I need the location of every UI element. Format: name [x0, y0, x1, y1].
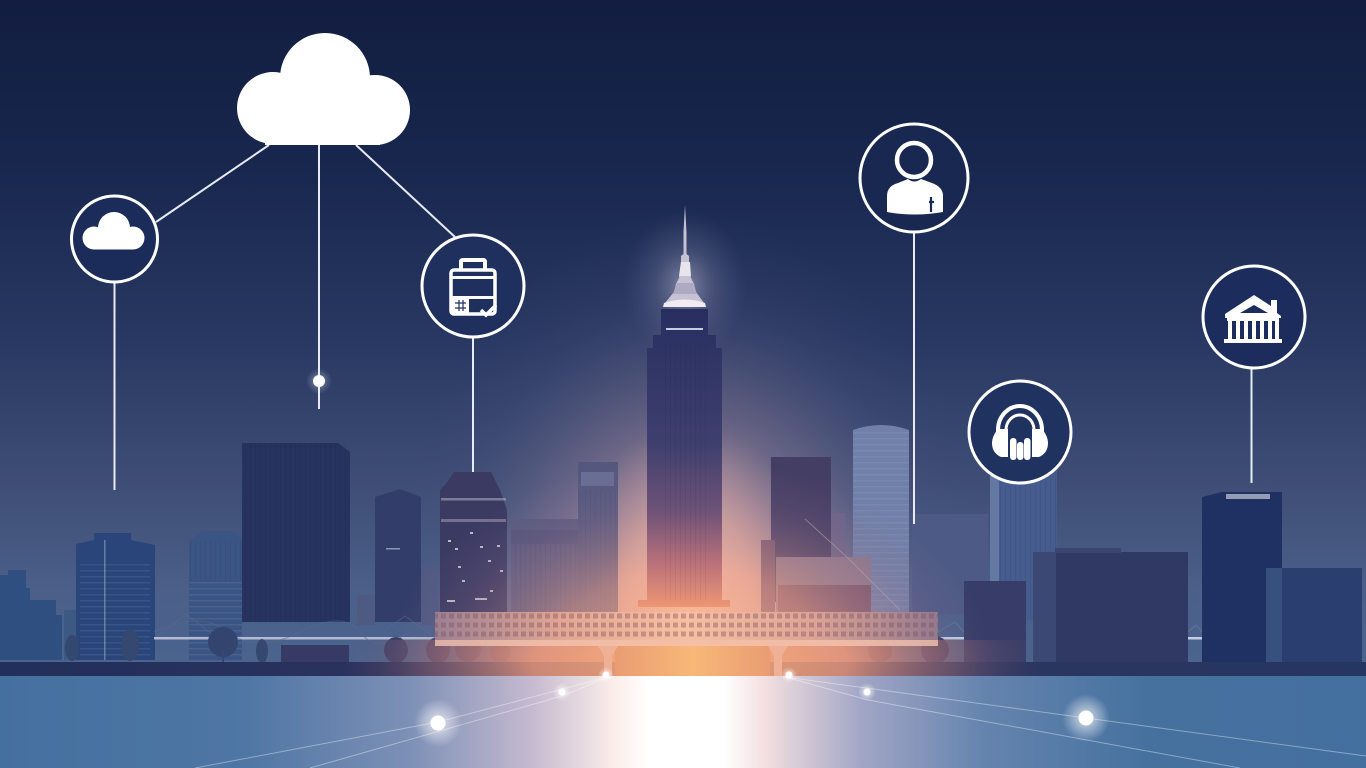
water network lines: [195, 677, 1366, 768]
trees: [65, 627, 949, 664]
water node: shore right: [781, 667, 797, 683]
mid tower glow: [565, 420, 815, 768]
building: right dark tower with sign: [1202, 492, 1282, 662]
building: large right block: [1033, 548, 1188, 662]
water node: shore left: [598, 667, 614, 683]
building: tall dark block: [242, 443, 350, 622]
water: [0, 676, 1366, 768]
building: low right block: [912, 514, 988, 614]
skyline: far-left cluster: [0, 570, 78, 660]
tower spire: [663, 205, 706, 307]
icon: suitcase badge: [422, 235, 524, 337]
water node: small left: [553, 683, 571, 701]
icon: person badge: [860, 124, 968, 232]
building: tall block behind headphones: [990, 470, 1057, 620]
tower shaft: [638, 309, 730, 607]
light overlay on skyline: [380, 440, 1000, 662]
icon: main cloud: [237, 33, 410, 145]
building: right stub: [964, 581, 1026, 662]
icon: bank badge: [1203, 266, 1305, 368]
tower stripes: [661, 345, 708, 600]
building: glass cylinder tower: [853, 425, 909, 612]
building: left twin block: [76, 533, 155, 660]
building: right dark tower: [761, 457, 845, 612]
building: far right block: [1266, 568, 1362, 662]
water node: small right: [858, 683, 876, 701]
central sky glow: [300, 200, 1080, 676]
connector lines from main cloud: [156, 145, 455, 409]
building: left mid tower: [189, 531, 242, 660]
water node: bright left: [414, 699, 462, 747]
building: podium offices: [511, 519, 581, 615]
icon: small cloud badge: [72, 196, 158, 282]
ground strip: [0, 662, 1366, 676]
skyline bridge: [154, 614, 1202, 643]
spire glow: [623, 210, 747, 360]
central tower: [638, 205, 730, 607]
building: front mall: [776, 519, 900, 613]
water node: bright right: [1062, 694, 1110, 742]
vertical pin lines: [114, 233, 1252, 524]
building: lit windows tower: [440, 472, 507, 614]
building: small slab tower: [357, 489, 438, 625]
building: signed tower: [578, 462, 618, 614]
tower sign: [666, 328, 703, 330]
lower orange glow band: [340, 640, 1040, 676]
elevated podium: [435, 612, 938, 646]
center underpass: [598, 646, 788, 676]
connector node dot: [306, 368, 332, 394]
icon: headphones badge: [969, 381, 1071, 483]
